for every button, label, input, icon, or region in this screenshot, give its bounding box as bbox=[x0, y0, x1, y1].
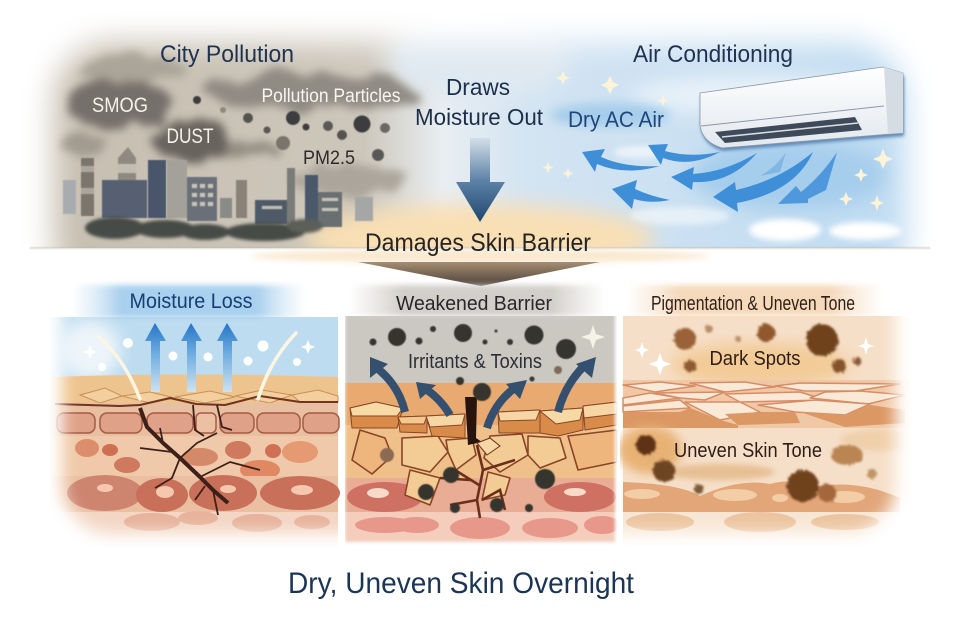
label: draws moisture out: Draws bbox=[446, 74, 510, 100]
pollution particles bbox=[193, 96, 390, 161]
dark spots bbox=[636, 324, 877, 502]
crack bbox=[55, 396, 338, 515]
heading: air conditioning: Air Conditioning bbox=[633, 41, 793, 68]
city skyline bbox=[63, 147, 373, 227]
panel: weakened barrier bbox=[345, 316, 620, 547]
heading: city pollution: City Pollution bbox=[160, 41, 294, 68]
label: pollution particles: Pollution Particles bbox=[262, 86, 400, 107]
panel: moisture loss bbox=[50, 317, 340, 547]
band: damages skin barrier: Damages Skin Barrier bbox=[365, 229, 591, 257]
heading band: pigmentation bbox=[630, 285, 880, 316]
air conditioner unit bbox=[700, 67, 904, 151]
dark arrows bbox=[374, 366, 584, 428]
footer title: Dry, Uneven Skin Overnight bbox=[288, 567, 635, 600]
sparkle bbox=[581, 325, 605, 349]
panel: air conditioning bbox=[542, 67, 904, 241]
raised tiles bbox=[350, 402, 617, 438]
vapour streaks bbox=[99, 333, 296, 399]
heading band: weakened barrier: Weakened Barrier bbox=[396, 293, 552, 315]
heading band: moisture loss bbox=[75, 285, 303, 318]
heading band: moisture loss: Moisture Loss bbox=[130, 290, 252, 313]
sparkles bbox=[635, 337, 874, 375]
panel: city pollution bbox=[61, 54, 415, 241]
crack bbox=[465, 397, 482, 445]
label: draws moisture out bbox=[415, 74, 544, 130]
cracked tiles bbox=[352, 430, 617, 505]
label: pm2.5: PM2.5 bbox=[303, 148, 355, 169]
label: dry ac air: Dry AC Air bbox=[568, 107, 664, 132]
moisture arrows bbox=[145, 323, 238, 392]
label: irritants and toxins: Irritants & Toxins bbox=[408, 351, 542, 373]
toxin particles bbox=[370, 324, 576, 513]
label: draws moisture out: Moisture Out bbox=[415, 104, 544, 130]
heading band: weakened barrier bbox=[352, 285, 602, 316]
trees bbox=[85, 217, 323, 241]
band: damages skin barrier bbox=[30, 229, 930, 286]
arrow: down bbox=[456, 138, 505, 222]
heading band: pigmentation: Pigmentation & Uneven Tone bbox=[651, 293, 855, 315]
label: dust: DUST bbox=[166, 125, 214, 148]
label: smog: SMOG bbox=[92, 94, 148, 117]
panel: pigmentation bbox=[618, 316, 923, 547]
skin tiles bbox=[623, 382, 905, 420]
label: uneven skin tone: Uneven Skin Tone bbox=[674, 440, 822, 462]
panel: top scene backdrop bbox=[36, 24, 922, 248]
cool air arrows bbox=[582, 144, 837, 212]
label: dark spots: Dark Spots bbox=[710, 348, 800, 370]
clouds bbox=[614, 146, 901, 241]
sparkles bbox=[542, 71, 893, 211]
